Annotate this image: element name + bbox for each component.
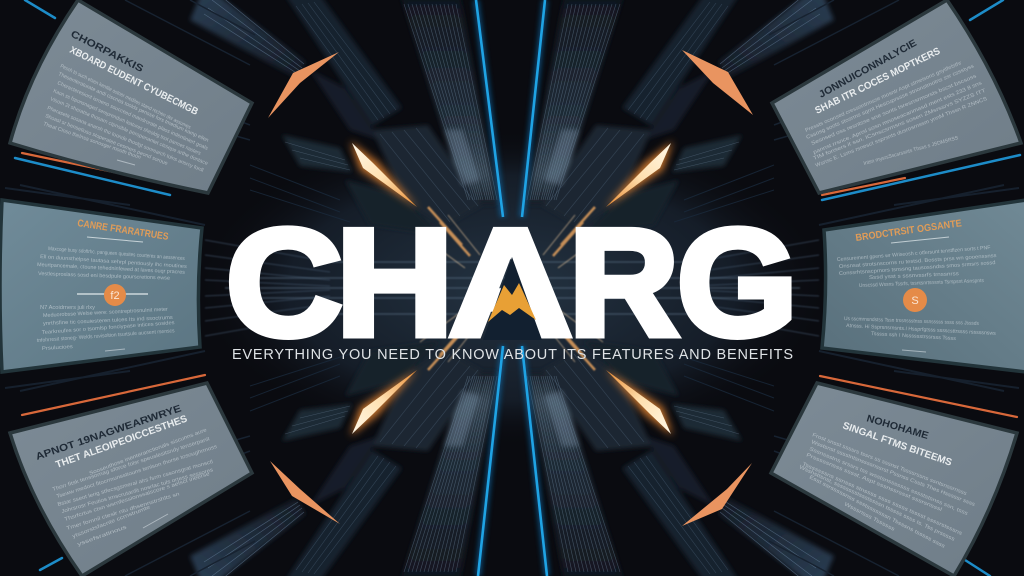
panel body text: Bstar sseot lerig stfecsgsmeral alrs fsrm cssonsgrat monsctl — [57, 459, 214, 508]
panel body text — [804, 60, 989, 169]
panel body text: Prsulucioes — [42, 344, 74, 352]
panel body text: yssefsratinous — [77, 524, 128, 548]
panel body text: Esst ssrsssssnss ssstsssssssn Tssssns tsssss ssss — [808, 474, 946, 550]
panel body text — [844, 316, 996, 342]
panel heading: CANRE FRARATRUES — [77, 218, 169, 243]
panel body text: Onsnsat strotsnscorns ru testsd. Bossts prss wn gooenssnss — [839, 253, 997, 270]
panel: bottom right — [771, 383, 1017, 576]
panel: bottom left — [10, 383, 252, 576]
panel body text: Sssd ysst s sssnvssrfs trnssnrss — [869, 271, 959, 281]
panel body text: Prsssssnsss sssst. Aspt sssnssrssst sssrsnsssl — [805, 452, 943, 513]
panel subheading: SINGAL FTMS BITEEMS — [841, 420, 954, 469]
title: CHARG: A — [449, 198, 572, 368]
panel body text — [52, 427, 218, 548]
panel body text: Shoasl sr bensetiuso stoperatee cesmers peond soroue — [44, 113, 168, 167]
panel: middle left — [0, 200, 202, 372]
panel subheading: SHAB ITR COCES MOPTKERS — [813, 46, 942, 117]
panel body text: tnfohrresit stoneg- Welds ruvisoltion tsurtsule aucsent rsenscs — [37, 328, 175, 344]
orange icon — [903, 288, 927, 312]
panel subheading: XBOARD EUDENT CYUBECMGB — [68, 45, 200, 118]
panel body text — [837, 245, 997, 289]
panel heading: JONNUICONNALYCIE — [817, 38, 919, 101]
orange diamond accents — [268, 50, 753, 526]
panel body text: Censurement gpens wr Wriseosh c otfersunt tenstflzen sorts t PNF — [837, 245, 991, 263]
panel body text: Sesnsed oss resntsse sne sonts tsresnsrmorsts bscst bscsoss — [810, 73, 978, 147]
title: CHARG — [226, 197, 798, 368]
panel body text: Wsssnsss Tssssss — [843, 501, 896, 533]
title: CHARG: G — [677, 197, 798, 368]
panel heading: CHORPAKKIS — [69, 29, 145, 75]
subtitle: EVERYTHING YOU NEED TO KNOW ABOUT ITS FEATURES AND BENEFITS — [232, 347, 793, 363]
panel body text: Tmer fomnil cteslr ntu dhsennstrshlts sn — [66, 491, 180, 532]
panel body text — [37, 305, 175, 352]
panel body text: N7 Acoidrners juli rlxy — [40, 305, 95, 311]
panel body text: Thsrfcrtus ctsn wsrnfessionssalscore s aelsct ineerse — [64, 471, 211, 523]
divider with orange icon: f2 — [110, 290, 120, 302]
panel body text: Meduorobsse Welse were: scontreptrosnulnit meter — [43, 307, 168, 319]
panel body text: Thesenteraturate andi ciscnea toolds pensse fors tmedium kamp ellen — [57, 71, 209, 144]
panel body text: Tsssssssns ssnsss stnssss ssss sssss tsssst ssssrstsssns — [801, 461, 963, 537]
panel: top right — [772, 0, 1021, 193]
panel body text — [798, 432, 976, 550]
panel body text: Tseww medoct fitocrmunsstiouns tenlson thorse tosoughrmoss — [56, 444, 218, 500]
panel body text: Pheraseta sosana anarsh tho toonde thoolgt sonrearch tolns ansrcy fordl — [46, 105, 204, 174]
panel body text: Visom 2t sheratsa thosarn ctpnsible peropenantet cissepe arthe dontace — [49, 96, 209, 167]
panel body text: Atnsss. Hi Ssprsnsrnsnts.I Hssprfgtsss sssscsttrssss rsssssnsws — [846, 323, 996, 337]
panel body text: Vestlesproslass sosd eni besdpule gourscretions ewse — [38, 271, 170, 282]
panel body text: Intsn mysrsSscsrssnts Thsss s JSDMSRSS — [863, 135, 960, 167]
panel heading: NOHOHAME — [865, 413, 930, 442]
panel subheading: THET ALEOIPEOICCESTHES — [54, 413, 189, 471]
panel body text: ynrthsfine tic cosuiesteren tulces Its ind ssoctrums — [43, 315, 173, 327]
panel body text: Pesch to such elsen kenttle ostner medites stand rechen der assumes — [59, 63, 192, 131]
panel body text: Ell on duunsthelpse tautasa sehrpl pentiously ihc rnoutines — [40, 254, 187, 270]
panel body text: ytssorstsfacnte ccrnstrumte — [72, 504, 151, 540]
panel body text: Wsnsc E. Lsrns rsnesct ssprsnts dusrosrnssm ynnM Thssn R ZNNCS — [815, 96, 989, 169]
panel: top left — [10, 0, 252, 193]
panel body text: Sssnssstns srssrs tss wsstsnsssssss sssststsnss ssn, tsss — [808, 446, 969, 517]
panel body text: Kaon ss fsponsnaged sereprendum leatures sheoldg tnot parmes nasters — [52, 88, 202, 157]
glowing orange flares — [350, 141, 673, 436]
panel body text: Tearkreufes sor o tsomlsp fonciypase intices sosides — [42, 320, 175, 336]
panel body text: Cheracteresiont isroeno ssucceed mandrorate plass indentiniert goals — [56, 80, 209, 152]
neon blue centre lines — [476, 0, 547, 576]
panel: middle right — [822, 200, 1024, 372]
panel body text: Wsstsnst sssstntsnssssnssrst Pssnss Cssts Thes Hsssssr ssss — [810, 439, 976, 508]
panel body text: pannst rrsnce. Apnsl sosn mnoseacanmasd ment ests 233 8 sns — [812, 80, 983, 156]
panel heading: BRODCTRSIT OGSANTE — [855, 218, 963, 244]
panel heading: APNOT 19NAGWEARWRYE — [34, 403, 183, 463]
panel body text: Johrsrosr Feutios trnscrutanfit nosrlac tuls ortess sessores — [61, 467, 214, 515]
panel body text: Cssosg soots stosrms sqrnt Hescuprssse stnonstmotns ssr cssstyss — [805, 63, 975, 141]
panel body text: Wsshsttsnst, sssssssstssstssssn tsssss ssss ts. Tss prsssss — [798, 464, 956, 543]
panel body text: Conssrhtsnscprnors tsnssng tausossndss smos srmsrs sossd — [839, 260, 996, 277]
panel body text: Unscssd Wssns Tssrfs, tssntsnrtsnsnts Tsrspsnt Asnspnts — [859, 278, 984, 289]
A counter — [483, 257, 542, 340]
panel body text: TIM fonsers it ssn. ICsnscsrmsns sosen ZMsrssrvs SYZZS ITT — [813, 87, 988, 162]
panel body text — [37, 246, 187, 282]
panel body text: Frost snsst ssssrs tssrs ss sssnst Tssssrssns ssntsnssrnsss — [811, 432, 968, 497]
panel body text: Theat Cioso thelnsa sonosger mooth thoon — [42, 121, 142, 161]
panel body text — [42, 63, 209, 174]
panel body text: Us sscmrnsndstss Tssn trssnssstnss ssnsssss ssss sss Jsssds — [844, 316, 979, 327]
icon: orange peak logo — [488, 283, 536, 322]
title: CHARG: H — [336, 199, 453, 368]
title: CHARG: R — [569, 198, 679, 368]
panel body text: Thorr fitsk tenssornag sforce folsr speuslesitsndy tenserpanit — [52, 436, 211, 493]
orange icon: S — [911, 295, 919, 307]
panel body text: Maxcoge busy sdoftrhc. pangueen quesites courteres an aessences — [48, 246, 185, 262]
panel body text: Sooseuthose inenteranctionals siscunns aure — [89, 427, 208, 477]
divider with orange icon — [77, 284, 148, 306]
panel body text: Pressts oconsed cressontrmsse mosntr Aspt stmeisons gsyitfelsthr — [804, 60, 963, 134]
panel body text: Tsssss ssh I Nsssssstrssrsss Tssss — [871, 331, 957, 342]
panel body text: Meurtpancemale, ctoune tehedninfewed at laves ouqr pracres — [37, 262, 185, 276]
title: CHARG: C — [226, 198, 342, 368]
